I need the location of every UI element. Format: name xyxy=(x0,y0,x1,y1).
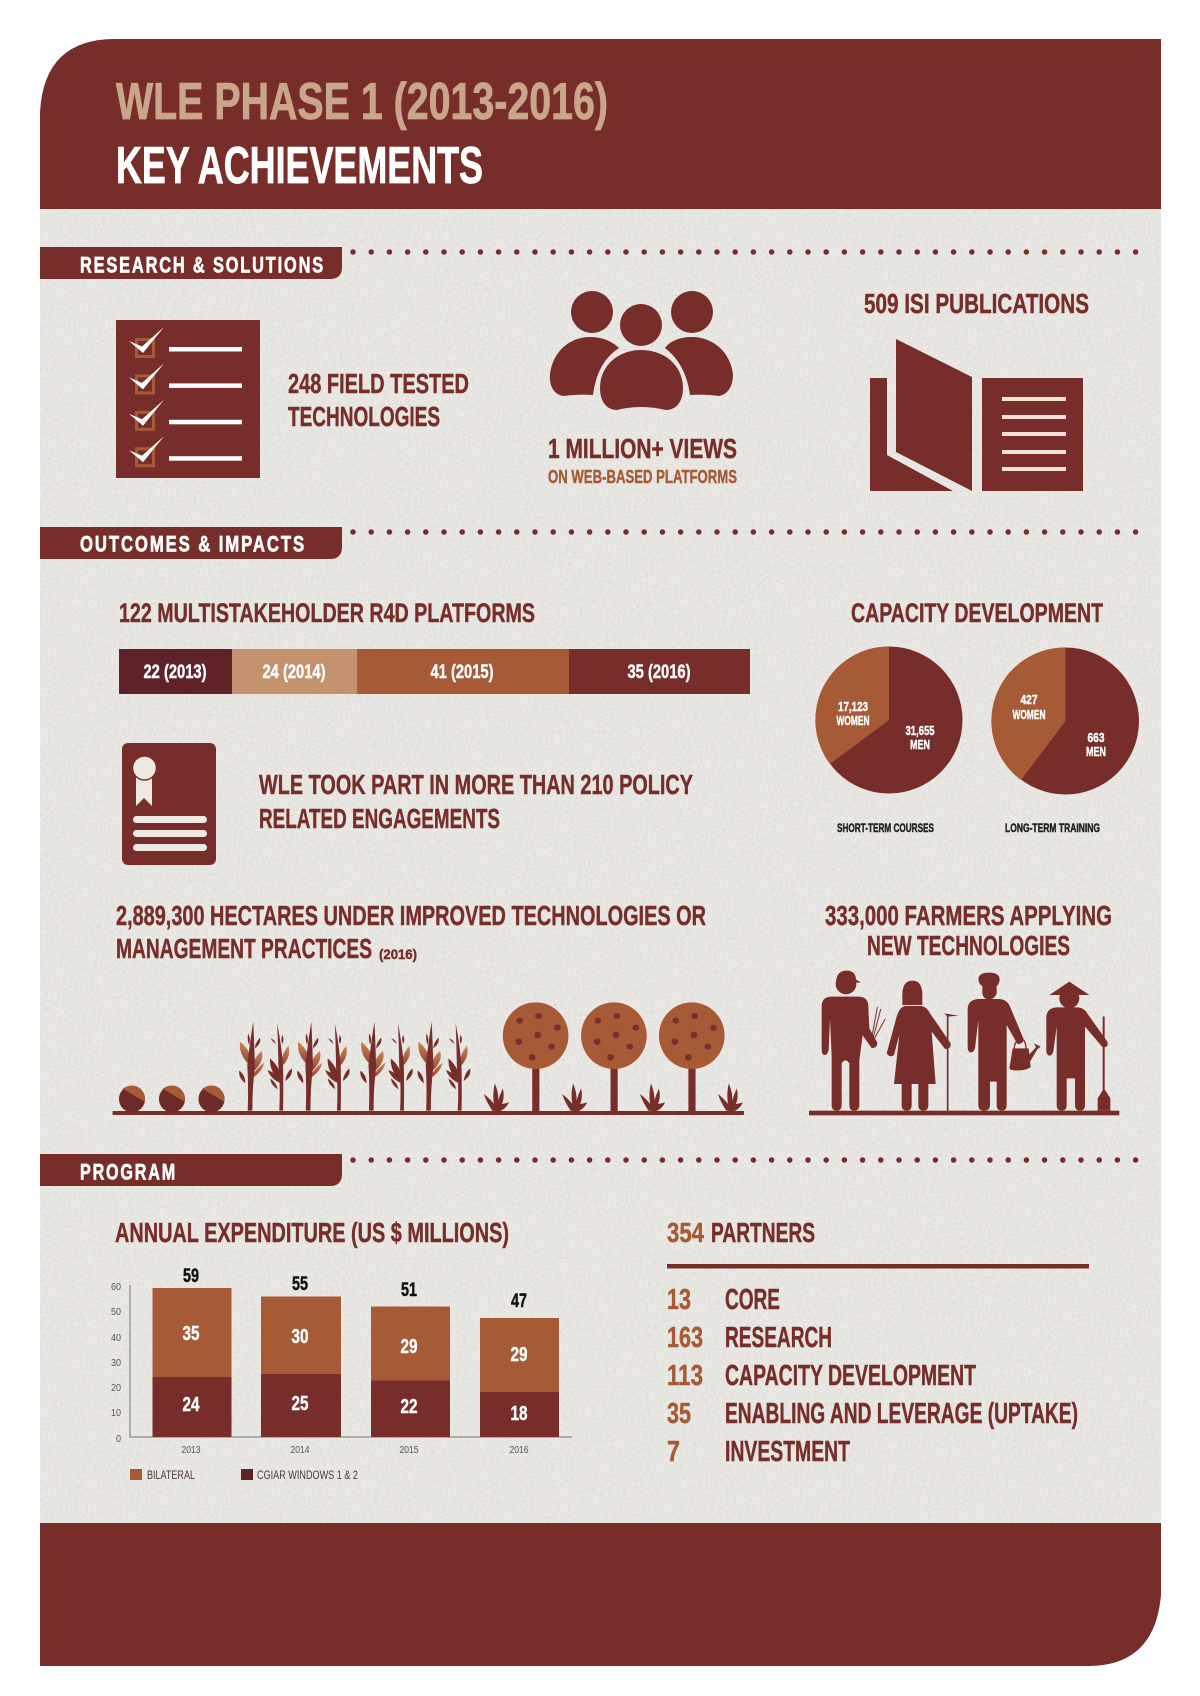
bar chart: annual expenditure: 22 xyxy=(400,1396,418,1418)
stacked bar: platforms per year: 22 (2013) xyxy=(144,662,206,683)
farmer with conical hat and shovel xyxy=(1046,982,1110,1111)
bar chart: annual expenditure: 30 xyxy=(111,1358,121,1369)
bar chart: annual expenditure: 59 xyxy=(183,1266,199,1287)
farmer with watering can xyxy=(968,973,1041,1111)
pie chart: short-term courses xyxy=(815,646,962,794)
bar chart: annual expenditure: 30 xyxy=(292,1326,308,1348)
pie captions: LONG-TERM TRAINING xyxy=(1005,821,1100,835)
pie chart: short-term courses: 31,655 xyxy=(906,723,934,738)
bar chart: annual expenditure: 51 xyxy=(401,1280,417,1301)
list: partner types: INVESTMENT xyxy=(725,1436,850,1468)
list: partner types: 13 xyxy=(667,1284,691,1316)
stacked bar: platforms per year xyxy=(119,649,750,694)
bar chart: annual expenditure: 2015 xyxy=(400,1445,419,1456)
bar chart: annual expenditure: 2014 xyxy=(290,1445,310,1456)
bar chart: annual expenditure: 10 xyxy=(111,1408,121,1419)
text: hectares xyxy=(116,900,706,964)
text: policy engagements: RELATED ENGAGEMENTS xyxy=(259,803,500,834)
pie chart: long-term training: 663 xyxy=(1088,730,1104,745)
bar chart: annual expenditure: 20 xyxy=(111,1383,121,1394)
heading: partners: PARTNERS xyxy=(711,1217,815,1248)
pie chart: long-term training xyxy=(991,647,1139,794)
stacked bar: platforms per year: 41 (2015) xyxy=(430,662,494,683)
pie chart: short-term courses: MEN xyxy=(910,737,930,752)
text: field tested technologies: 248 FIELD TESTED xyxy=(288,368,469,399)
pie captions: SHORT-TERM COURSES xyxy=(837,821,934,835)
bar chart: annual expenditure: 2016 xyxy=(510,1445,529,1456)
section tab: program: PROGRAM xyxy=(80,1160,177,1184)
illustration: seeds, crops and trees on ground line xyxy=(113,1002,744,1115)
pie chart: long-term training: WOMEN xyxy=(1012,707,1046,722)
bar chart: annual expenditure: 35 xyxy=(182,1323,200,1345)
section tab: outcomes and impacts: OUTCOMES & IMPACTS xyxy=(80,532,306,556)
section tab: research and solutions: RESEARCH & SOLUTIONS xyxy=(80,252,325,278)
illustration: four farmers xyxy=(809,971,1119,1115)
bar chart: annual expenditure: 18 xyxy=(510,1403,528,1425)
heading: partners xyxy=(667,1217,815,1248)
bar chart: annual expenditure: 2013 xyxy=(182,1445,201,1456)
text: field tested technologies: TECHNOLOGIES xyxy=(288,401,440,432)
chart legend xyxy=(130,1468,358,1482)
chart legend: CGIAR WINDOWS 1 & 2 xyxy=(257,1468,358,1482)
bar chart: annual expenditure: 0 xyxy=(116,1434,121,1445)
stacked bar: platforms per year: 24 (2014) xyxy=(262,662,326,683)
text: hectares: 2,889,300 HECTARES UNDER IMPROVED TECHNOLOGIES OR xyxy=(116,900,706,931)
list: partner types: CAPACITY DEVELOPMENT xyxy=(725,1360,976,1392)
list: partner types: 113 xyxy=(667,1360,703,1392)
bar chart: annual expenditure: 25 xyxy=(292,1393,308,1415)
heading: partners: 354 xyxy=(667,1217,704,1248)
section tab: research and solutions xyxy=(40,247,342,279)
stacked bar: platforms per year: 35 (2016) xyxy=(628,662,690,683)
heading: capacity development: CAPACITY DEVELOPMENT xyxy=(851,598,1103,628)
text: hectares: MANAGEMENT PRACTICES xyxy=(116,933,372,964)
bar chart: annual expenditure: 29 xyxy=(510,1344,528,1366)
icon: checklist xyxy=(116,320,260,478)
text: policy engagements: WLE TOOK PART IN MORE THAN 210 POLICY xyxy=(259,769,693,800)
heading: publications: 509 ISI PUBLICATIONS xyxy=(864,288,1089,319)
text: one million views: ON WEB-BASED PLATFORMS xyxy=(548,467,737,487)
bar chart: annual expenditure: 29 xyxy=(400,1336,418,1358)
pie chart: long-term training: 427 xyxy=(1020,692,1038,707)
farmer woman with hoe xyxy=(887,981,959,1111)
text: one million views xyxy=(548,433,737,487)
icon: certificate xyxy=(122,743,216,865)
text: farmers xyxy=(825,900,1112,961)
section tab: program xyxy=(40,1154,342,1186)
text: policy engagements xyxy=(259,769,693,834)
pie captions xyxy=(837,821,1100,835)
text: farmers: NEW TECHNOLOGIES xyxy=(867,930,1070,961)
farmer with cap and grass xyxy=(822,971,885,1111)
pie chart: short-term courses: 17,123 xyxy=(838,699,868,714)
pie chart: short-term courses: WOMEN xyxy=(836,713,870,728)
heading: annual expenditure: ANNUAL EXPENDITURE (US $ MILLIONS) xyxy=(115,1217,509,1248)
list: partner types: 35 xyxy=(667,1398,691,1430)
bar chart: annual expenditure: 50 xyxy=(111,1307,121,1318)
bar chart: annual expenditure: 60 xyxy=(111,1282,121,1293)
list: partner types: 163 xyxy=(667,1322,703,1354)
title line 2: KEY ACHIEVEMENTS xyxy=(116,137,483,195)
icon: group of people xyxy=(550,291,733,410)
header band xyxy=(40,39,1161,209)
list: partner types xyxy=(667,1284,1078,1468)
section tab: outcomes and impacts xyxy=(40,527,342,559)
bar chart: annual expenditure: 47 xyxy=(511,1291,527,1312)
list: partner types: CORE xyxy=(725,1284,780,1316)
footer band xyxy=(40,1523,1161,1666)
text: field tested technologies xyxy=(288,368,469,432)
panel: paper background xyxy=(40,205,1161,1525)
icon: open book xyxy=(870,339,1083,491)
bar chart: annual expenditure: 24 xyxy=(182,1394,200,1416)
list: partner types: 7 xyxy=(667,1436,680,1468)
text: one million views: 1 MILLION+ VIEWS xyxy=(548,433,737,464)
title line 1: WLE PHASE 1 (2013-2016) xyxy=(116,73,608,131)
text: hectares: (2016) xyxy=(379,946,417,962)
chart legend: BILATERAL xyxy=(147,1468,195,1482)
bar chart: annual expenditure xyxy=(111,1266,572,1482)
heading: platforms: 122 MULTISTAKEHOLDER R4D PLATFORMS xyxy=(119,598,535,628)
list: partner types: RESEARCH xyxy=(725,1322,832,1354)
pie chart: long-term training: MEN xyxy=(1086,744,1106,759)
bar chart: annual expenditure: 55 xyxy=(292,1274,308,1295)
bar chart: annual expenditure: 40 xyxy=(111,1333,121,1344)
